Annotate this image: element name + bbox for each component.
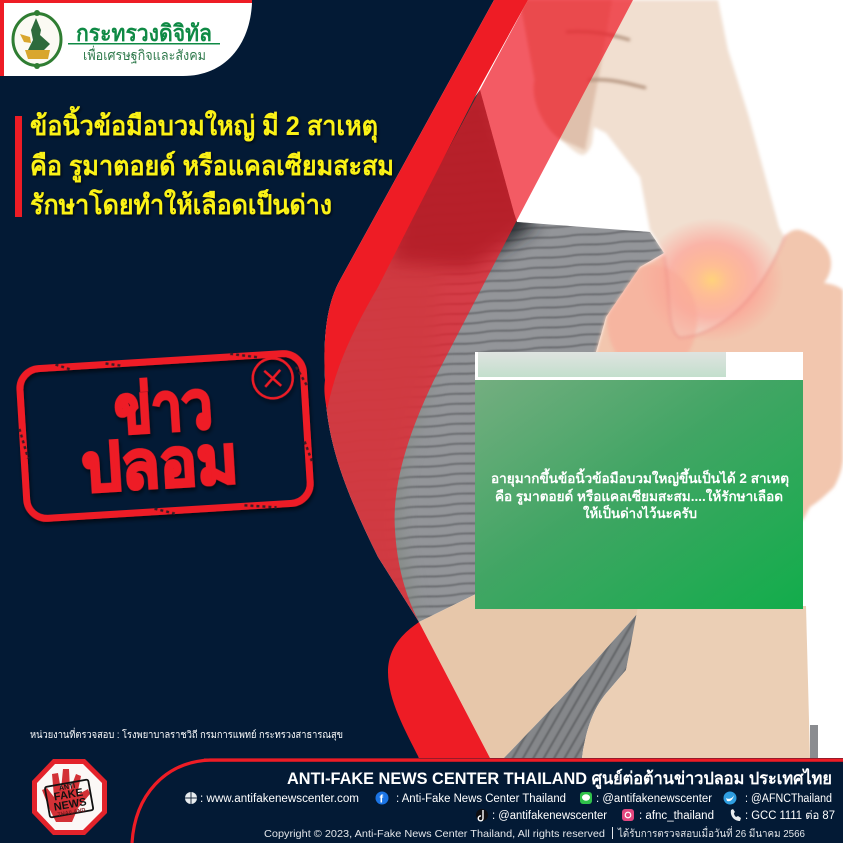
copyright line: ได้รับการตรวจสอบเมื่อวันที่ 26 มีนาคม 2566 [617, 826, 805, 840]
green claim card [475, 380, 803, 609]
ministry slogan: เพื่อเศรษฐกิจและสังคม [83, 46, 206, 64]
ministry name: กระทรวงดิจิทัล [76, 20, 212, 46]
stamp text: ปลอม [80, 422, 240, 505]
blurred post header [475, 352, 803, 380]
icon: ministry emblem [13, 10, 61, 69]
contact row 1: : www.antifakenewscenter.com [200, 793, 359, 805]
footer heading: ANTI-FAKE NEWS CENTER THAILAND ศูนย์ต่อต้านข่าวปลอม ประเทศไทย [287, 768, 832, 790]
title: ข้อนิ้วข้อมือบวมใหญ่ มี 2 สาเหตุ [30, 105, 378, 143]
agency source note: หน่วยงานที่ตรวจสอบ : โรงพยาบาลราชวิถี กรมการแพทย์ กระทรวงสาธารณสุข [30, 727, 343, 741]
footer panel [0, 758, 843, 843]
solid red lower shape [388, 622, 490, 758]
stamp text [76, 366, 240, 505]
contact row 2: : GCC 1111 ต่อ 87 [745, 810, 835, 822]
contact row 2: : @antifakenewscenter [492, 810, 607, 822]
solid red band [324, 0, 528, 410]
copyright line: Copyright © 2023, Anti-Fake News Center Thailand, All rights reserved [264, 828, 605, 840]
claim text: อายุมากขึ้นข้อนิ้วข้อมือบวมใหญ่ขึ้นเป็นได้ 2 สาเหตุ [491, 468, 789, 487]
claim text: คือ รูมาตอยด์ หรือแคลเซียมสะสม....ให้รักษาเลือด [495, 488, 783, 505]
translucent red band [325, 0, 633, 622]
claim text: ให้เป็นด่างไว้นะครับ [583, 504, 697, 521]
Anti-Fake News stop logo: THAILAND [57, 807, 86, 818]
photo: woman holding swollen wrist [300, 0, 843, 760]
contact row 1 [185, 792, 832, 806]
contact row 1: : Anti-Fake News Center Thailand [396, 793, 566, 805]
Anti-Fake News stop logo: ANTI [59, 783, 76, 793]
Anti-Fake News stop logo: FAKE [53, 787, 84, 804]
fake news stamp [16, 349, 315, 523]
contact row 2: : afnc_thailand [639, 810, 714, 822]
claim text [491, 468, 789, 521]
title [30, 105, 394, 220]
copyright line [264, 826, 805, 840]
contact row 2 [476, 809, 835, 822]
contact row 1: : @AFNCThailand [745, 793, 832, 805]
Anti-Fake News stop logo: NEWS [53, 796, 88, 814]
Anti-Fake News stop logo [32, 759, 107, 835]
ministry logo panel [0, 0, 252, 76]
contact row 1: f [380, 794, 384, 806]
title accent bar [15, 116, 22, 217]
title: รักษาโดยทำให้เลือดเป็นด่าง [30, 187, 332, 220]
icon: circled X [252, 357, 294, 400]
stamp text: ข่าว [112, 367, 214, 447]
title: คือ รูมาตอยด์ หรือแคลเซียมสะสม [30, 150, 394, 183]
contact row 1: : @antifakenewscenter [596, 793, 712, 805]
